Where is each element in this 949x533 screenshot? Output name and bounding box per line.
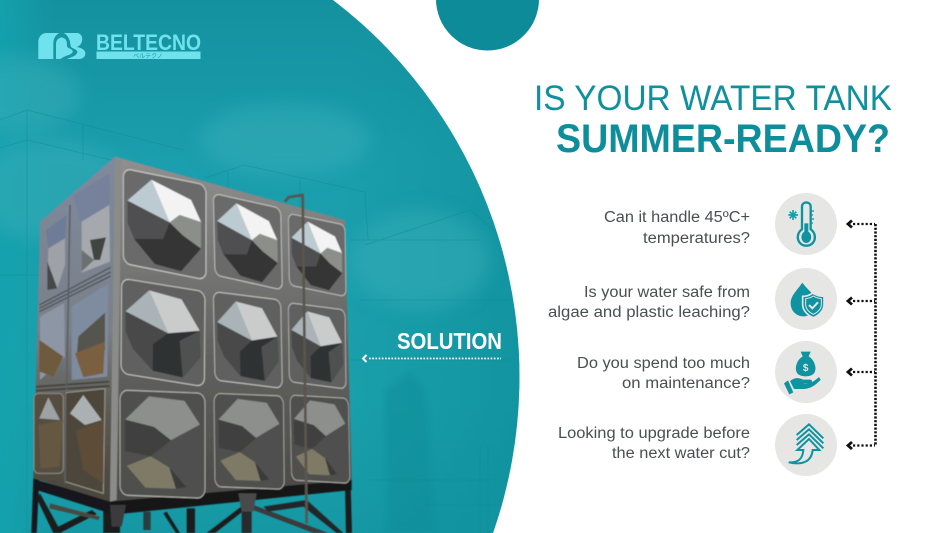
side upper facets: [73, 173, 110, 222]
tank stand: [31, 478, 352, 533]
top circle decoration: [436, 0, 539, 50]
title line 2: SUMMER-READY?: [556, 117, 890, 161]
icon: money bag over hand: [775, 341, 837, 403]
tank corner column: [110, 157, 122, 502]
question 2: Is your water safe from: [584, 284, 750, 301]
title line 1: IS YOUR WATER TANK: [534, 79, 892, 118]
question 2: algae and plastic leaching?: [548, 304, 750, 321]
faint background buildings: [0, 110, 510, 533]
question 4: [558, 425, 750, 462]
clouds: [0, 57, 490, 310]
logo bar: [96, 52, 200, 59]
logo wordmark: BELTECNO: [96, 30, 201, 55]
logo katakana: ベルテクノ: [133, 53, 163, 60]
icon: money bag over hand: $: [803, 363, 809, 374]
tank front face: [110, 157, 352, 502]
arrow: solution to tank: [363, 355, 501, 362]
photo: stainless steel water tank on stand: [31, 150, 352, 533]
icon: thermometer: [775, 193, 837, 255]
title: [534, 79, 892, 161]
question 2: [548, 284, 750, 321]
solution label: [363, 328, 502, 362]
solution heading: SOLUTION: [397, 328, 502, 354]
logo: Beltecno: [38, 30, 201, 60]
question 1: [604, 209, 750, 247]
panel: teal photo background: [0, 0, 530, 533]
question 3: Do you spend too much: [577, 355, 750, 372]
front panels: [120, 168, 350, 498]
arrow: dotted connector to icons: [848, 220, 876, 449]
icon: water drop with shield: [775, 268, 837, 330]
question 1: temperatures?: [643, 230, 750, 247]
ladder pipe: [285, 195, 307, 523]
icon: upgrade arrow chevrons: [775, 414, 837, 476]
question 3: [577, 355, 750, 392]
question 3: on maintenance?: [622, 375, 750, 392]
side lower facets: [34, 393, 63, 473]
tank left side: [33, 150, 115, 502]
question 1: Can it handle 45ºC+: [604, 209, 750, 226]
question 4: Looking to upgrade before: [558, 425, 750, 442]
side middle facets: [40, 303, 65, 380]
question 4: the next water cut?: [612, 445, 750, 462]
logo mark: [38, 33, 85, 59]
